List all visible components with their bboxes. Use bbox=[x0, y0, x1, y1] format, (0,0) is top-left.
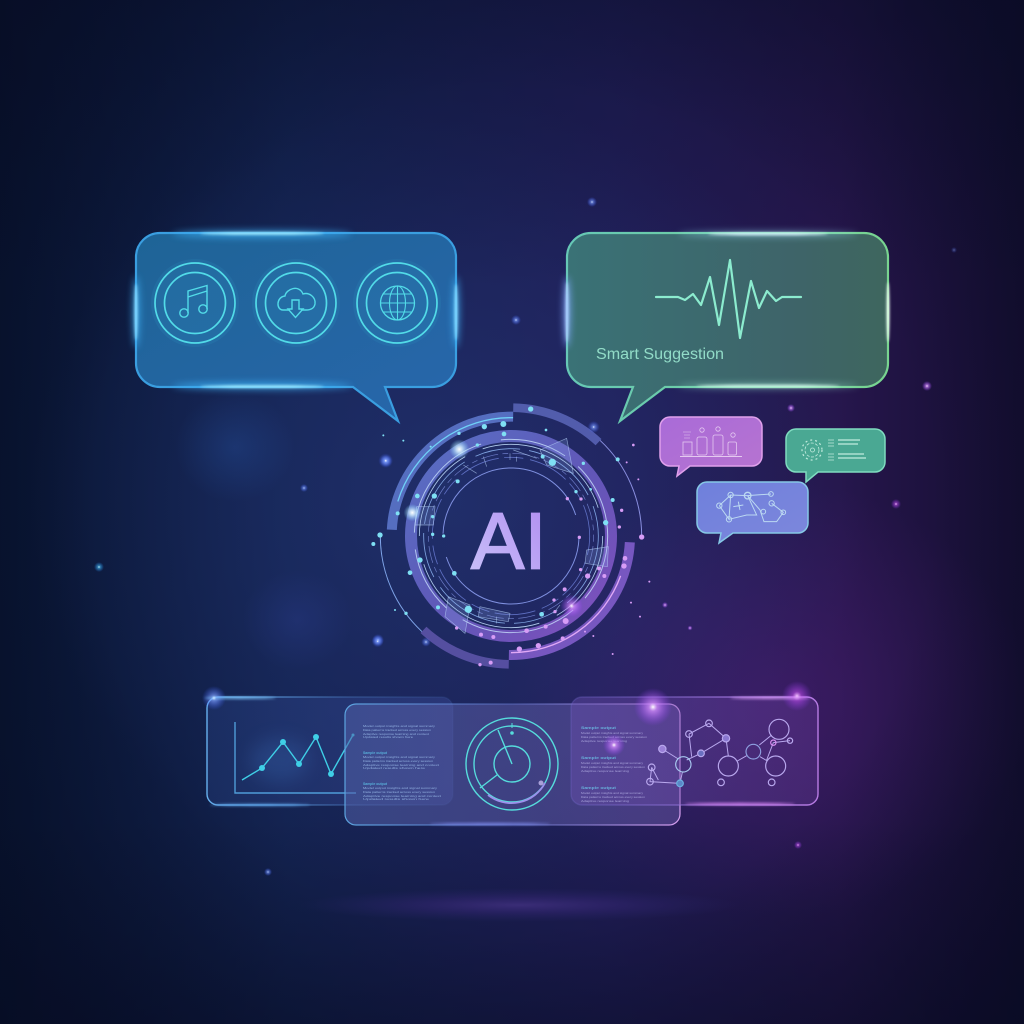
text block: center notes: Adaptive response learning and context bbox=[363, 794, 441, 798]
text block: center notes: Adaptive response learning and context bbox=[363, 763, 439, 767]
line chart bbox=[235, 722, 356, 793]
inner main ring band bbox=[411, 436, 611, 636]
inner thin rings bbox=[414, 439, 608, 633]
data points bbox=[371, 406, 620, 617]
text block: right notes: Sample output bbox=[581, 726, 617, 730]
panel: purple small bubble bbox=[660, 417, 762, 476]
icon: music note bbox=[151, 259, 239, 347]
text block: right notes: Model output insights and signal summary bbox=[581, 791, 644, 795]
text block: center notes: Sample output bbox=[363, 751, 388, 755]
icon: gear and notes bbox=[802, 440, 866, 460]
text block: center notes: Updated results shown here bbox=[363, 797, 430, 801]
title: AI: AI bbox=[471, 496, 547, 585]
text block: right notes: Model output insights and signal summary bbox=[581, 731, 644, 735]
panel: text and radar card bbox=[345, 704, 680, 825]
text block: center notes: Adaptive response learning and context bbox=[363, 732, 429, 736]
icon: node network bbox=[717, 492, 786, 522]
panel: molecule network card bbox=[571, 697, 818, 805]
icon: radar dial bbox=[466, 718, 558, 810]
text block: center notes: Model output insights and signal summary bbox=[363, 724, 436, 728]
text block: right notes: Adaptive response learning bbox=[581, 739, 628, 743]
text block: center notes: Updated results shown here bbox=[363, 735, 414, 739]
panel: line chart card bbox=[202, 686, 453, 805]
text block: center notes: Sample output bbox=[363, 782, 388, 786]
panel: media speech bubble bbox=[132, 230, 460, 421]
panel: blue small bubble bbox=[697, 482, 808, 543]
bright sparks bbox=[372, 421, 600, 647]
text block: right notes: Data patterns tracked across every session bbox=[581, 795, 646, 799]
central AI ring bbox=[326, 351, 696, 721]
icon: bar people bbox=[680, 427, 742, 456]
text block: right notes bbox=[581, 726, 648, 803]
text block: center notes: Model output insights and signal summary bbox=[363, 755, 436, 759]
icon: globe bbox=[353, 259, 441, 347]
text block: right notes: Data patterns tracked across every session bbox=[581, 735, 648, 739]
lens flares bbox=[204, 681, 812, 825]
label: smart suggestion: Smart Suggestion bbox=[596, 346, 724, 363]
outer arc segments bbox=[326, 351, 696, 721]
text block: center notes: Data patterns tracked across every session bbox=[363, 790, 436, 794]
text block: right notes: Adaptive response learning bbox=[581, 769, 630, 773]
text block: center notes: Updated results shown here bbox=[363, 766, 426, 770]
text block: center notes: Data patterns tracked across every session bbox=[363, 728, 432, 732]
text block: right notes: Sample output bbox=[581, 786, 617, 790]
icon: molecule network bbox=[647, 719, 793, 787]
text block: right notes: Sample output bbox=[581, 756, 617, 760]
icon: cloud download bbox=[252, 259, 340, 347]
text block: center notes: Model output insights and signal summary bbox=[363, 786, 438, 790]
background glows and particles bbox=[94, 197, 957, 922]
panel: smart suggestion speech bubble bbox=[563, 231, 890, 421]
text block: right notes: Adaptive response learning bbox=[581, 799, 630, 803]
icon: pulse waveform bbox=[656, 260, 801, 338]
panel: green small bubble bbox=[786, 429, 885, 482]
text block: center notes: Data patterns tracked across every session bbox=[363, 759, 434, 763]
text block: right notes: Model output insights and signal summary bbox=[581, 761, 644, 765]
text block: center notes bbox=[363, 724, 441, 801]
text block: right notes: Data patterns tracked across every session bbox=[581, 765, 646, 769]
circuit details bbox=[415, 438, 608, 633]
